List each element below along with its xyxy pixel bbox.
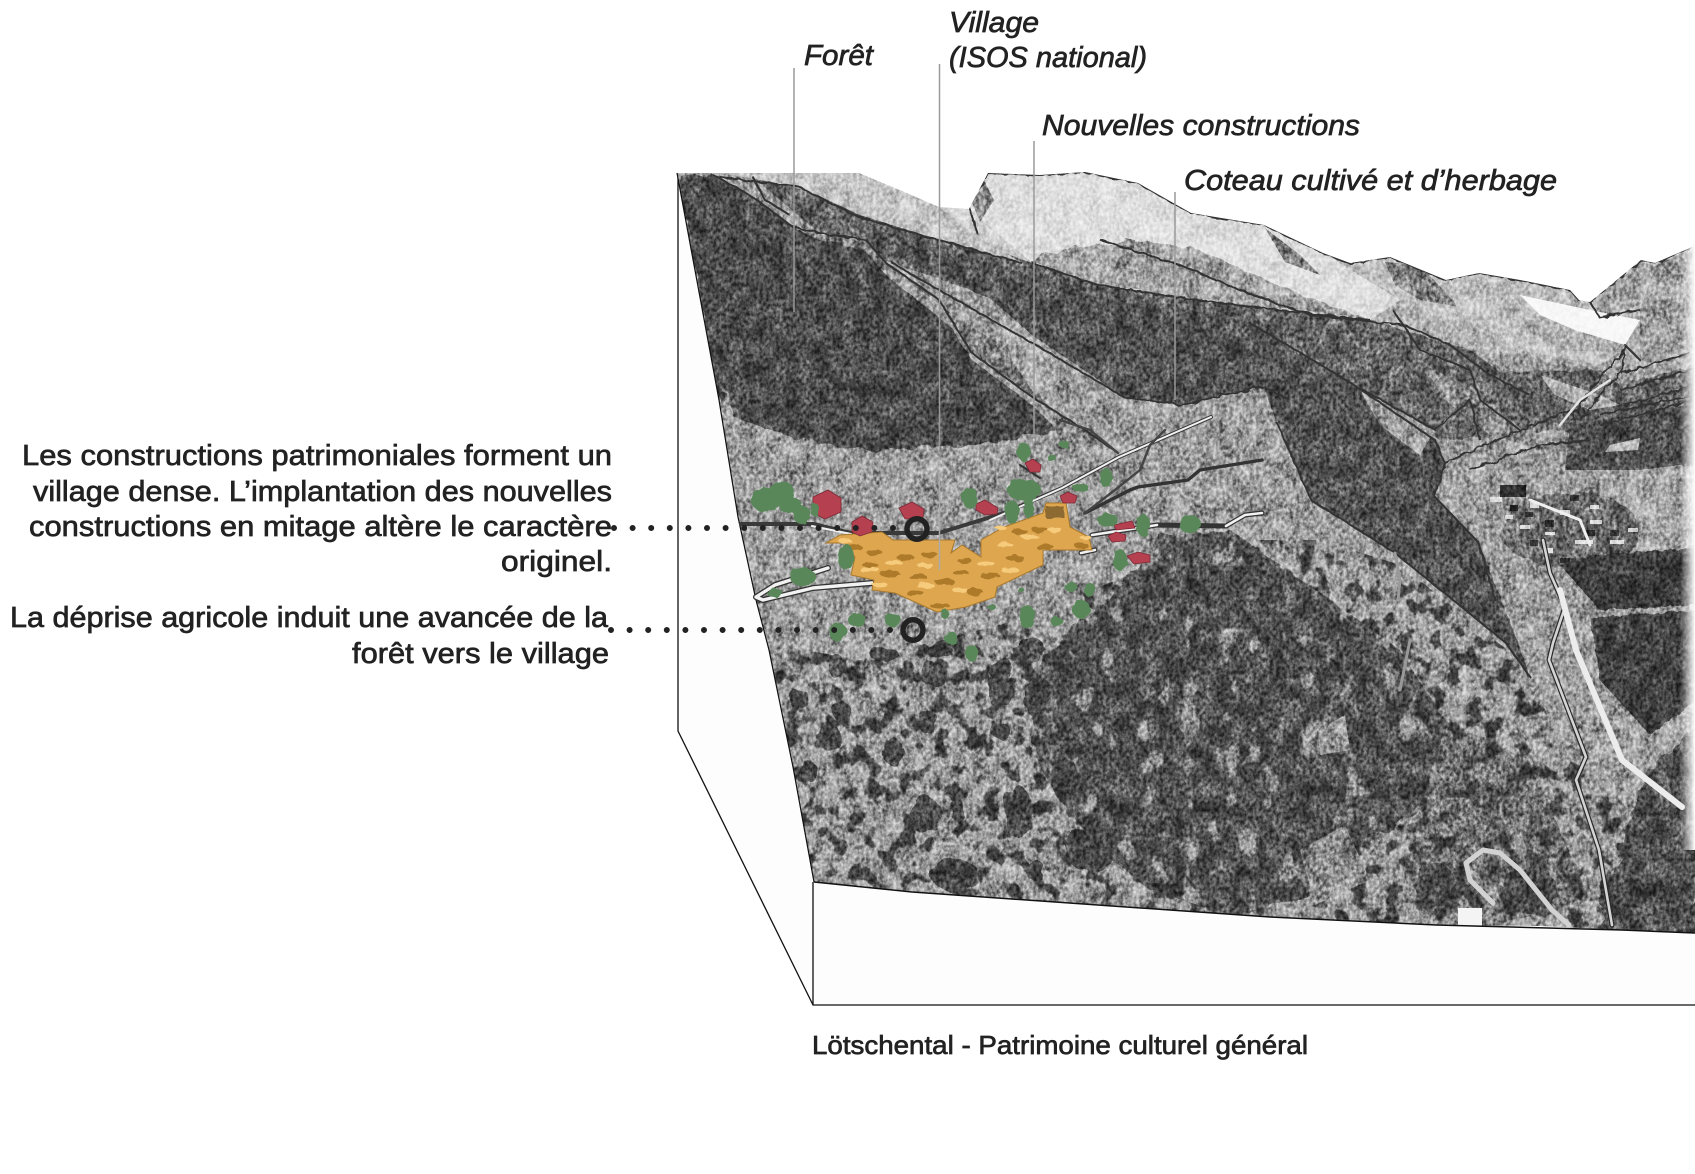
callout ring: mitage <box>907 519 927 539</box>
caption: Lötschental - Patrimoine culturel général <box>812 1030 1308 1060</box>
label: Village ISOS national <box>949 7 1147 74</box>
text block: dense village and mitage <box>22 440 612 578</box>
label: Forêt: Forêt <box>804 40 875 72</box>
far valley forest <box>1565 405 1695 470</box>
local roads <box>741 417 1410 690</box>
tree clumps <box>790 638 1642 915</box>
terrain aerial photo <box>670 165 1695 940</box>
village roofs: light <box>838 525 1091 592</box>
right valley forests <box>1560 548 1695 610</box>
text block: dense village and mitage: village dense. L’implantation des nouvelles <box>33 476 612 508</box>
right valley road and stream <box>1458 380 1682 926</box>
dark rock faces <box>972 182 1695 360</box>
text block: dense village and mitage: Les constructions patrimoniales forment un <box>22 440 612 472</box>
scattered tree clumps on lower slope <box>771 540 1695 932</box>
callout ring: forest advance <box>903 620 923 640</box>
bright rock peak <box>970 190 1400 320</box>
photo texture <box>670 165 1695 940</box>
glacier <box>1520 295 1640 345</box>
text block: dense village and mitage: constructions en mitage altère le caractère <box>29 511 612 543</box>
dotted callout line: mitage <box>614 525 895 531</box>
scree <box>1003 330 1058 395</box>
upper forest band <box>753 177 1695 470</box>
fade on right edge <box>1680 230 1695 850</box>
text block: dense village and mitage: originel. <box>501 546 612 578</box>
text block: agricultural decline: La déprise agricole induit une avancée de la <box>10 602 609 634</box>
dotted callout line: forest advance <box>611 627 892 633</box>
label: Village ISOS national: (ISOS national) <box>949 42 1147 74</box>
far valley pasture <box>1615 465 1695 545</box>
clearing strip <box>806 233 1118 453</box>
historic village (ISOS) <box>826 503 1092 612</box>
village footprint <box>826 503 1092 612</box>
clearings inside forest <box>1034 532 1435 911</box>
new constructions (red houses) <box>813 459 1150 564</box>
village roofs: shade <box>848 506 1089 608</box>
lower rock shade <box>1030 240 1370 320</box>
left edge of terrain <box>677 173 814 882</box>
forest B <box>840 215 1530 677</box>
light clearing in forest <box>1318 715 1350 755</box>
rock strip above forest <box>720 173 1022 263</box>
forest A <box>677 173 1058 450</box>
bottom edge of terrain <box>814 882 1695 933</box>
text block: agricultural decline: forêt vers le village <box>352 638 609 670</box>
block diagram side faces <box>678 173 1695 1005</box>
valley town <box>1500 492 1640 568</box>
label: Nouvelles constructions: Nouvelles constructions <box>1042 110 1360 142</box>
contour lines <box>713 172 1695 677</box>
centre dense forest <box>1030 530 1445 915</box>
label: Coteau cultivé et d'herbage: Coteau cultivé et d’herbage <box>1184 165 1557 197</box>
leader lines <box>794 64 1175 570</box>
meadow patches <box>1358 387 1435 455</box>
text block: agricultural decline <box>10 602 609 670</box>
meadow base <box>670 165 1695 940</box>
label: Village ISOS national: Village <box>949 7 1039 39</box>
highlighted trees <box>751 441 1201 661</box>
high mountains <box>776 173 1690 379</box>
